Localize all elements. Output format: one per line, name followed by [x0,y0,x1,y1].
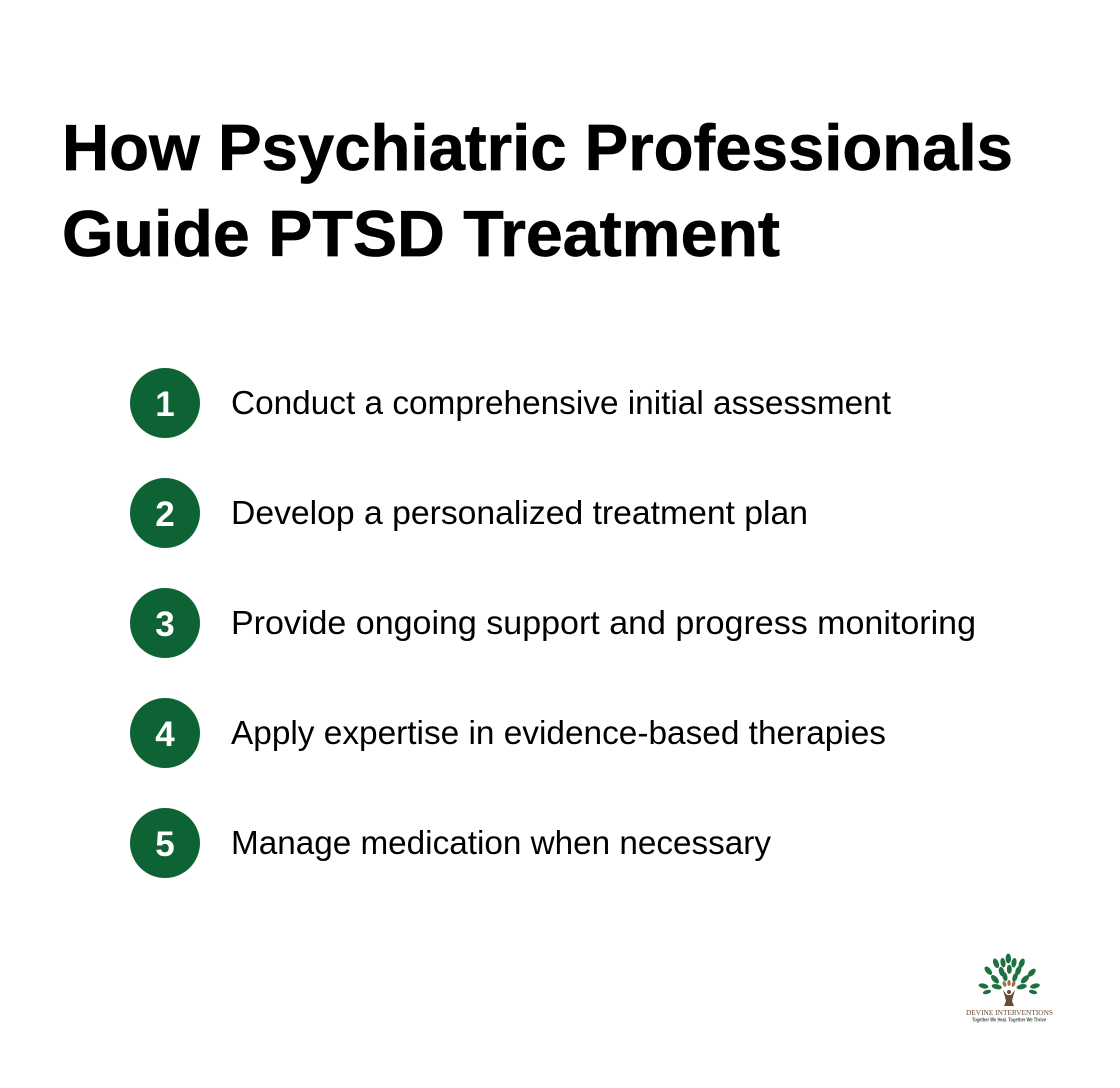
icon: tree trunk figure [1002,980,1016,1006]
step 5: Manage medication when necessary [231,824,772,861]
step 2: 2 [155,495,175,534]
step 4 [130,698,886,768]
step 2: Develop a personalized treatment plan [231,494,808,531]
logo tagline: Together We Heal. Together We Thrive [972,1018,1046,1024]
step 3: 3 [155,605,175,644]
step 1: 1 [155,385,175,424]
step 3: Provide ongoing support and progress monitoring [231,604,976,641]
step 1: Conduct a comprehensive initial assessment [231,384,891,421]
step 4: Apply expertise in evidence-based therapies [231,714,886,751]
step 4: 4 [155,715,175,754]
title: Guide PTSD Treatment [62,197,780,270]
logo: Devine Interventions [966,954,1053,1024]
step 5 [130,808,772,878]
title [62,111,1013,270]
icon: tree leaves [978,954,1040,995]
step 3 [130,588,976,658]
step 5: 5 [155,825,175,864]
step 1 [130,368,891,438]
logo name: DEVINE INTERVENTIONS [966,1009,1053,1017]
title: How Psychiatric Professionals [62,111,1013,184]
step 2 [130,478,808,548]
